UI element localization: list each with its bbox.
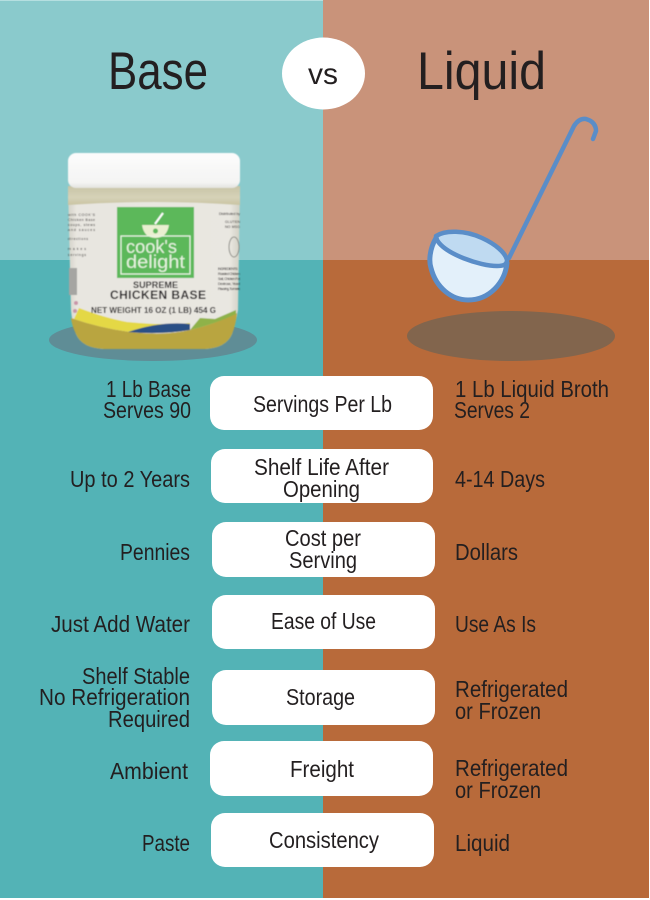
icon: chicken base jar: soups, stews: [68, 223, 95, 227]
ladle handle: [509, 119, 596, 258]
row: storage: [39, 663, 568, 732]
icon: chicken base jar: Chicken Base: [68, 218, 95, 222]
row: consistency: Liquid: [455, 830, 510, 856]
row: freight: [110, 741, 568, 803]
icon: chicken base jar: directions: [68, 237, 88, 241]
row: shelf life: Up to 2 Years: [70, 466, 190, 492]
row: shelf life: [70, 449, 545, 503]
row: ease of use: Just Add Water: [51, 611, 190, 637]
panel: base background: [0, 0, 323, 898]
icon: chicken base jar: and sauces: [68, 228, 95, 232]
vs badge: vs: [308, 58, 338, 91]
liquid shadow: [407, 311, 615, 361]
row: cost per serving: [120, 522, 518, 577]
heading: Liquid: Liquid: [417, 42, 546, 101]
icon: chicken base jar: Salt, Chicken Fat: [218, 277, 240, 281]
icon: chicken base jar: makes: [68, 247, 86, 251]
ladle rim: [436, 232, 507, 266]
icon: chicken base jar: cook's: [126, 237, 177, 257]
row: storage: Storage: [286, 684, 355, 710]
row: ease of use: Ease of Use: [271, 608, 376, 634]
row: consistency: Paste: [142, 830, 190, 856]
icon: chicken base jar: NO MSG: [225, 225, 240, 229]
row: storage: No Refrigeration: [39, 684, 190, 710]
row: freight: Freight: [290, 756, 355, 782]
row: freight: Ambient: [110, 758, 189, 784]
icon: chicken base jar: INGREDIENTS:: [218, 267, 238, 271]
row: servings per lb: Serves 90: [103, 397, 191, 423]
icon: chicken base jar: SUPREME: [133, 280, 178, 290]
row: cost per serving: Pennies: [120, 539, 190, 565]
icon: chicken base jar: [68, 153, 240, 349]
row: storage: or Frozen: [455, 698, 541, 724]
row: consistency: Consistency: [269, 827, 379, 853]
row: servings per lb: Servings Per Lb: [253, 391, 392, 417]
row: storage: Shelf Stable: [82, 663, 190, 689]
row: storage: Required: [108, 706, 190, 732]
panel: liquid background: [323, 0, 649, 898]
row: freight: or Frozen: [455, 777, 541, 803]
row: cost per serving: Serving: [289, 547, 357, 573]
row: cost per serving: Cost per: [285, 525, 361, 551]
icon: chicken base jar: NET WEIGHT 16 OZ (1 LB) 454 G: [91, 306, 216, 315]
row: servings per lb: 1 Lb Base: [106, 376, 191, 402]
icon: chicken base jar: Roasted Chicken: [218, 272, 240, 276]
jar shadow: [49, 319, 257, 361]
vs badge: [282, 38, 365, 110]
icon: chicken base jar: Distributed by: [219, 212, 240, 216]
ladle bowl: [430, 238, 507, 300]
icon: chicken base jar: delight: [126, 252, 185, 272]
icon: chicken base jar: Dextrose, Yeast: [218, 282, 240, 286]
row: consistency: [142, 813, 510, 867]
heading: Base: Base: [108, 42, 208, 101]
row: ease of use: [51, 595, 536, 649]
row: servings per lb: [103, 376, 609, 430]
row: servings per lb: 1 Lb Liquid Broth: [455, 376, 609, 402]
row: cost per serving: Dollars: [455, 539, 518, 565]
row: servings per lb: Serves 2: [454, 397, 530, 423]
icon: chicken base jar: servings: [68, 253, 86, 257]
row: freight: Refrigerated: [455, 755, 568, 781]
row: storage: Refrigerated: [455, 676, 568, 702]
row: shelf life: Opening: [283, 476, 360, 502]
icon: ladle: [430, 119, 596, 300]
icon: chicken base jar: CHICKEN BASE: [110, 288, 206, 302]
icon: chicken base jar: with COOK'S: [68, 213, 96, 217]
icon: chicken base jar: Flavoring, Turmeric: [218, 287, 240, 291]
row: shelf life: Shelf Life After: [254, 454, 389, 480]
icon: chicken base jar: GLUTEN: [225, 220, 240, 224]
row: shelf life: 4-14 Days: [455, 466, 545, 492]
row: ease of use: Use As Is: [455, 611, 536, 637]
